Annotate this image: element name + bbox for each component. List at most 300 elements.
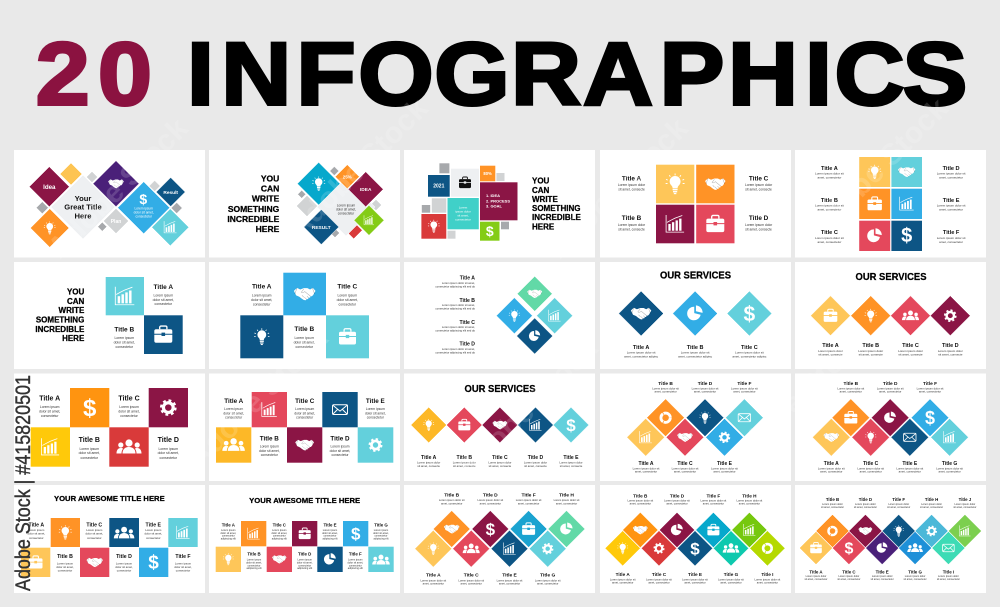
top labels [821, 497, 977, 509]
top labels: amet, consectetur [654, 390, 677, 394]
panel 9: our services three diamonds [600, 262, 791, 369]
pie diamond [871, 399, 909, 436]
dollar diamond [677, 531, 713, 566]
pie diamond [517, 318, 553, 354]
panel 20: zigzag ten diamonds [795, 485, 986, 593]
top labels: amet, consectetur [703, 501, 724, 505]
text blocks: amet, consectetur [817, 240, 841, 244]
heading text: YOU [261, 173, 279, 183]
briefcase diamond [696, 512, 731, 548]
bottom labels: amet, consectetur [461, 581, 482, 585]
bottom labels: sit amet, consectetur [837, 578, 861, 581]
chart square [241, 521, 266, 546]
briefcase diamond [510, 511, 547, 547]
bottom labels: Title A [638, 461, 654, 467]
heading: YOUR AWESOME TITLE HERE [249, 496, 360, 505]
text blocks: Lorem ipsum [175, 561, 192, 565]
top labels: Lorem ipsum dolor sit [516, 498, 542, 502]
text blocks: Lorem ipsum [272, 529, 287, 532]
dollar square: $ [83, 395, 97, 422]
text blocks: sit amet, consecte [618, 187, 645, 191]
bottom labels: amet, consectetur [423, 581, 444, 585]
text blocks: adipiscing elit [373, 538, 389, 541]
dollar diamond: $ [925, 408, 935, 428]
heading text: CAN [67, 297, 85, 306]
dollar diamond: $ [744, 303, 756, 326]
text blocks: Title B [57, 554, 73, 560]
text blocks: Lorem ipsum dolor [745, 183, 773, 187]
stock watermark: Adobe Stock [182, 322, 335, 475]
dollar diamond: $ [844, 540, 853, 558]
text blocks: Lorem ipsum [374, 529, 388, 532]
top labels: Lorem ipsum dolor sit [477, 498, 503, 502]
top labels: Title D [859, 497, 872, 502]
center text diamond [317, 178, 375, 236]
top labels: Lorem ipsum dolor [955, 503, 975, 506]
text blocks: adipiscing elit [322, 538, 338, 541]
bottom labels: sit amet, consectetur [904, 578, 927, 581]
result diamond [304, 210, 339, 244]
text blocks: Title F [349, 552, 362, 557]
panel 2: you can write with diamonds [209, 150, 400, 258]
dollar square: $ [486, 223, 494, 239]
text blocks: Lorem ipsum dolor sit [815, 236, 844, 240]
gear square [358, 427, 393, 463]
bottom labels: Lorem ipsum dolor sit [672, 466, 699, 470]
percent diamond: 25% [343, 174, 352, 179]
center title diamond: Great Title [64, 203, 102, 212]
labels: sit amet, consecte [489, 464, 512, 468]
text blocks: Lorem ipsum [260, 444, 279, 448]
text blocks: Lorem ipsum dolor sit [815, 172, 844, 176]
panel 7: three squares [209, 262, 400, 369]
gear diamond [915, 514, 948, 548]
dollar diamond: $ [690, 539, 700, 558]
people diamond [453, 530, 490, 567]
bottom labels: Lorem ipsum dolor sit [497, 578, 523, 582]
text blocks: Lorem ipsum [114, 336, 134, 340]
text blocks: Lorem ipsum [57, 561, 74, 565]
small gray diamonds [296, 166, 382, 239]
text blocks [28, 522, 192, 573]
bottom labels [633, 461, 738, 474]
bottom labels [420, 573, 561, 585]
text blocks: dolor sit amet, [251, 298, 272, 302]
bottom labels: Lorem ipsum dolor sit [718, 577, 744, 581]
bottom labels: sit amet, consectetur [937, 578, 960, 581]
bulb diamond [496, 298, 532, 334]
text blocks: consectetur [81, 456, 99, 460]
lorem square: consectetur [455, 218, 471, 222]
top labels: Lorem ipsum dolor sit [554, 498, 580, 502]
text blocks: adipiscing elit [221, 538, 236, 541]
text blocks: adipiscing elit [272, 538, 287, 541]
top labels: Title J [959, 497, 972, 502]
labels: Lorem ipsum dolor [453, 460, 476, 464]
heading: OUR SERVICES [464, 384, 536, 395]
stock watermark: Adobe Stock [722, 322, 875, 475]
text blocks: dolor sit amet, [246, 562, 262, 565]
text blocks: dolor sit amet, [294, 411, 315, 415]
handshake diamond [482, 407, 518, 443]
text blocks: Lorem ipsum [221, 529, 236, 532]
text blocks: Lorem ipsum [86, 528, 103, 532]
dollar diamond [472, 511, 509, 547]
text blocks: Lorem ipsum [247, 559, 261, 562]
text blocks: adipiscing elit [297, 567, 313, 570]
text blocks: sit amet, consecte [618, 227, 645, 231]
labels: sit amet, consecte [818, 353, 843, 357]
text blocks: dolor sit amet, [347, 562, 363, 565]
bottom labels: amet, consectetur [860, 470, 882, 474]
labels: Lorem ipsum dolor [417, 460, 440, 464]
chart square [891, 189, 922, 219]
bulb diamond [686, 399, 724, 436]
text blocks: dolor sit amet, [330, 449, 350, 453]
text blocks: Lorem ipsum [116, 561, 133, 565]
text blocks: Title A [224, 398, 244, 405]
gear diamond [641, 531, 677, 566]
small decorative diamonds [36, 163, 182, 231]
bottom labels: Lorem ipsum dolor sit [682, 577, 708, 581]
text list: Title D [460, 342, 475, 348]
people square [216, 427, 251, 463]
panel 1: diamonds with great title [14, 150, 205, 258]
top labels: amet, consectetur [518, 501, 539, 505]
text blocks: Title C [118, 395, 140, 402]
dollar diamond [118, 182, 170, 234]
text blocks: Lorem ipsum dolor [618, 183, 646, 187]
top labels: Title D [483, 493, 498, 499]
bottom labels [804, 570, 960, 581]
top labels: Title F [521, 493, 536, 499]
dollar square [480, 222, 500, 241]
text blocks: consectetur [324, 535, 337, 538]
dollar diamond: $ [139, 191, 147, 207]
bottom labels: amet, consectetur [684, 580, 706, 584]
bottom labels: Title G [540, 573, 555, 579]
center text diamond: Lorem ipsum [337, 203, 356, 207]
bottom labels: amet, consectetur [612, 580, 633, 584]
people diamond [891, 296, 930, 336]
text list: Lorem ipsum dolor sit amet, [442, 325, 475, 329]
bulb diamond [30, 209, 69, 247]
briefcase diamond [811, 296, 850, 336]
briefcase diamond [800, 532, 832, 564]
heading: OUR SERVICES [856, 272, 927, 283]
top labels: Lorem ipsum dolor sit [664, 498, 690, 502]
text blocks: Lorem ipsum [330, 444, 350, 448]
bottom labels: amet, consectetur [938, 470, 961, 474]
gear diamond [706, 418, 743, 456]
briefcase square [292, 521, 317, 546]
text blocks: consectetur [339, 302, 357, 306]
top labels: Title F [923, 381, 937, 387]
idea diamond: IDEA [360, 187, 372, 193]
panel 4: four squares [600, 150, 791, 258]
panel 10: our services four diamonds [795, 262, 986, 369]
bottom labels: Title E [717, 461, 733, 467]
heading text: WRITE [252, 194, 280, 204]
heading: YOUR AWESOME TITLE HERE [54, 494, 165, 503]
bulb square [216, 547, 241, 572]
top labels: Title H [925, 497, 938, 502]
handshake square [80, 548, 109, 577]
top labels: Title F [707, 493, 720, 498]
people diamond [713, 531, 749, 566]
text blocks: consectetur [349, 564, 362, 567]
text blocks: dolor sit amet, [153, 298, 174, 302]
top labels: Lorem ipsum dolor sit [737, 498, 762, 502]
list square: 1. IDEA [486, 193, 500, 198]
top labels: amet, consectetur [919, 390, 941, 394]
top labels: Lorem ipsum dolor sit [731, 386, 758, 390]
top labels [627, 493, 762, 505]
pie diamond [548, 511, 585, 547]
bottom labels: Lorem ipsum dolor sit [633, 466, 660, 470]
text blocks: Title A [29, 522, 44, 528]
people diamond [899, 532, 932, 564]
panel 5: six squares [795, 150, 986, 258]
text blocks: Title A [39, 395, 60, 402]
chart diamond [948, 514, 981, 548]
idea diamond: Idea [43, 184, 56, 191]
heading text [35, 288, 85, 343]
stock watermark: Adobe Stock [282, 92, 435, 245]
donut diamond [816, 514, 849, 548]
text blocks: Lorem ipsum [295, 407, 314, 411]
text blocks: dolor sit amet, [28, 532, 45, 536]
labels: Title D [942, 343, 959, 349]
panel 3: squares with text [404, 150, 595, 258]
top labels: amet, consectetur [630, 501, 651, 505]
dollar diamond: Lorem ipsum [134, 206, 153, 210]
bottom labels: Title C [863, 461, 879, 467]
labels: Lorem ipsum dolor [524, 460, 547, 464]
top labels [439, 493, 580, 505]
bulb diamond [297, 162, 340, 205]
bottom labels: Title G [908, 570, 922, 574]
heading text [227, 173, 280, 234]
text blocks: Title C [337, 284, 357, 291]
bottom labels: Title A [426, 573, 441, 579]
text blocks: dolor sit amet, [220, 532, 236, 535]
text blocks: Lorem ipsum dolor sit [815, 204, 844, 208]
panel 17: awesome title seven squares [209, 485, 400, 593]
heading text: SOMETHING [532, 204, 580, 213]
top labels: amet, consectetur [694, 390, 716, 394]
chart square [252, 392, 287, 427]
text blocks: Lorem ipsum [348, 559, 363, 562]
text blocks: dolor sit amet, [373, 532, 389, 535]
bottom labels: Lorem ipsum dolor [938, 575, 959, 578]
bottom labels: amet, consectetur [537, 581, 558, 585]
bottom labels: sit amet, consectetur [871, 578, 894, 581]
bottom labels: Title C [652, 572, 667, 577]
text blocks: dolor sit amet, [158, 451, 179, 455]
text blocks: consectetur [87, 536, 102, 540]
dollar diamond: consectetur [135, 214, 153, 218]
bottom labels: Lorem ipsum dolor sit [896, 466, 923, 470]
text blocks: Title C [821, 230, 838, 236]
text blocks: Lorem ipsum [40, 405, 60, 409]
text blocks: consectetur [253, 302, 271, 306]
text blocks: Lorem ipsum [294, 336, 314, 340]
text blocks: consectetur [29, 536, 44, 540]
side stock id text: Adobe Stock | #415820501 [12, 375, 35, 591]
text blocks: Title A [154, 284, 173, 291]
text blocks: Lorem ipsum [158, 447, 178, 451]
text blocks: dolor sit amet, [294, 340, 315, 344]
panel 15: zigzag seven diamonds [795, 374, 986, 481]
labels: Title C [902, 343, 919, 349]
top labels: Title B [826, 497, 839, 502]
bulb diamond [411, 407, 446, 443]
bulb square [859, 157, 890, 187]
text blocks: Title C [749, 176, 769, 182]
top labels: Lorem ipsum dolor sit [652, 386, 679, 390]
top labels: amet, consectetur [480, 501, 501, 505]
gear diamond [529, 530, 566, 567]
text blocks [251, 284, 358, 349]
top labels: amet, consectetur [739, 501, 760, 505]
lorem square [448, 198, 479, 229]
text blocks: dolor sit amet, [223, 411, 244, 415]
handshake square [283, 273, 326, 315]
top labels: Title B [444, 493, 460, 499]
text blocks: Title A [222, 522, 236, 527]
top labels: Title D [698, 381, 713, 387]
labels: amet, consectetur adipisc [624, 355, 659, 359]
lorem square: Lorem [459, 206, 468, 210]
labels: Title A [822, 343, 839, 349]
bottom labels: Lorem ipsum dolor [872, 575, 893, 578]
text blocks: consectetur [155, 302, 173, 306]
text blocks [220, 522, 389, 570]
chart diamond [732, 512, 767, 548]
labels: Title B [457, 455, 472, 461]
bottom labels: Lorem ipsum dolor [905, 575, 926, 578]
text blocks: Lorem ipsum dolor sit [937, 236, 966, 240]
labels: Lorem ipsum dolor sit [627, 351, 656, 355]
text blocks: dolor sit amet, [322, 532, 338, 535]
panel 19: zigzag nine diamonds [600, 485, 791, 593]
text list: Lorem ipsum dolor sit amet, [442, 347, 475, 351]
text blocks: Title B [247, 552, 261, 557]
text blocks: Title A [622, 176, 641, 182]
text list: consectetur adipiscing elit sed do [435, 306, 476, 310]
bulb diamond [882, 514, 915, 548]
top labels [652, 381, 758, 394]
dollar diamond: $ [566, 416, 576, 435]
handshake diamond [93, 161, 139, 207]
bottom labels: amet, consectetur [820, 470, 842, 474]
idea diamond [348, 172, 383, 207]
labels: sit amet, consecte [417, 464, 440, 468]
bottom labels: Title G [724, 572, 739, 577]
text blocks: consectetur [120, 414, 139, 418]
handshake diamond [812, 418, 850, 456]
dollar square [891, 221, 922, 251]
mail diamond [891, 418, 929, 456]
labels: Lorem ipsum dolor [818, 349, 843, 353]
text blocks: consectetur [296, 345, 314, 349]
bottom labels: amet, consectetur [635, 470, 657, 474]
top labels: Title F [737, 381, 751, 387]
text blocks: dolor sit amet, [39, 410, 60, 414]
handshake square [696, 165, 734, 203]
text blocks: consectetur [331, 453, 349, 457]
bottom labels: Title C [842, 570, 856, 574]
labels: Title E [563, 455, 579, 461]
top labels: Title D [883, 381, 898, 387]
handshake square [287, 427, 322, 463]
center title diamond: Your [75, 194, 91, 203]
stock watermark: Adobe Stock [42, 112, 195, 265]
top labels: Lorem ipsum dolor sit [917, 386, 944, 390]
bulb square [421, 214, 446, 239]
pie square [317, 547, 343, 572]
handshake diamond [623, 512, 658, 548]
labels: Lorem ipsum dolor [898, 349, 923, 353]
bottom labels: Lorem ipsum dolor [839, 575, 859, 578]
labels: Lorem ipsum dolor [938, 349, 963, 353]
people square [109, 427, 149, 467]
top labels: Lorem ipsum dolor [822, 503, 843, 506]
labels: Title D [528, 455, 544, 461]
bottom labels: Title E [876, 570, 889, 574]
text blocks: consectetur [225, 415, 243, 419]
bottom labels [818, 461, 963, 474]
heading text: INCREDIBLE [35, 325, 85, 334]
dollar diamond: $ [486, 520, 496, 539]
bottom labels: Lorem ipsum dolor sit [857, 466, 884, 470]
top labels: Lorem ipsum dolor sit [439, 498, 465, 502]
text blocks [815, 166, 966, 244]
text blocks: Title F [175, 554, 191, 560]
top labels: Title F [892, 497, 905, 502]
text list: Lorem ipsum dolor sit amet, [442, 281, 475, 285]
text blocks: sit amet, consecte [745, 187, 772, 191]
handshake diamond [849, 514, 882, 548]
text blocks: consectetur [261, 453, 279, 457]
labels: sit amet, consecte [898, 353, 923, 357]
heading text: SOMETHING [36, 316, 84, 324]
labels: Lorem ipsum dolor [858, 349, 883, 353]
donut diamond [750, 531, 785, 566]
handshake diamond [433, 511, 470, 547]
panel 6: two squares with heading [14, 262, 205, 369]
list square [480, 182, 518, 220]
chart diamond [627, 418, 664, 456]
chart diamond [931, 418, 968, 456]
labels: Title A [633, 345, 649, 351]
text blocks: Lorem ipsum [119, 405, 139, 409]
text blocks: consectetur [146, 536, 161, 540]
text blocks: dolor sit amet, [115, 565, 133, 569]
text blocks [618, 176, 773, 231]
briefcase square [451, 169, 479, 197]
text blocks: Title E [943, 198, 960, 204]
heading text: WRITE [59, 306, 85, 315]
bottom labels: Lorem ipsum dolor sit [610, 577, 636, 581]
text blocks: Lorem ipsum [153, 294, 173, 298]
text blocks: Title C [86, 522, 102, 528]
donut diamond [647, 399, 684, 436]
text blocks: consectetur [248, 564, 261, 567]
heading: OUR SERVICES [660, 270, 731, 282]
dollar square [139, 548, 168, 577]
